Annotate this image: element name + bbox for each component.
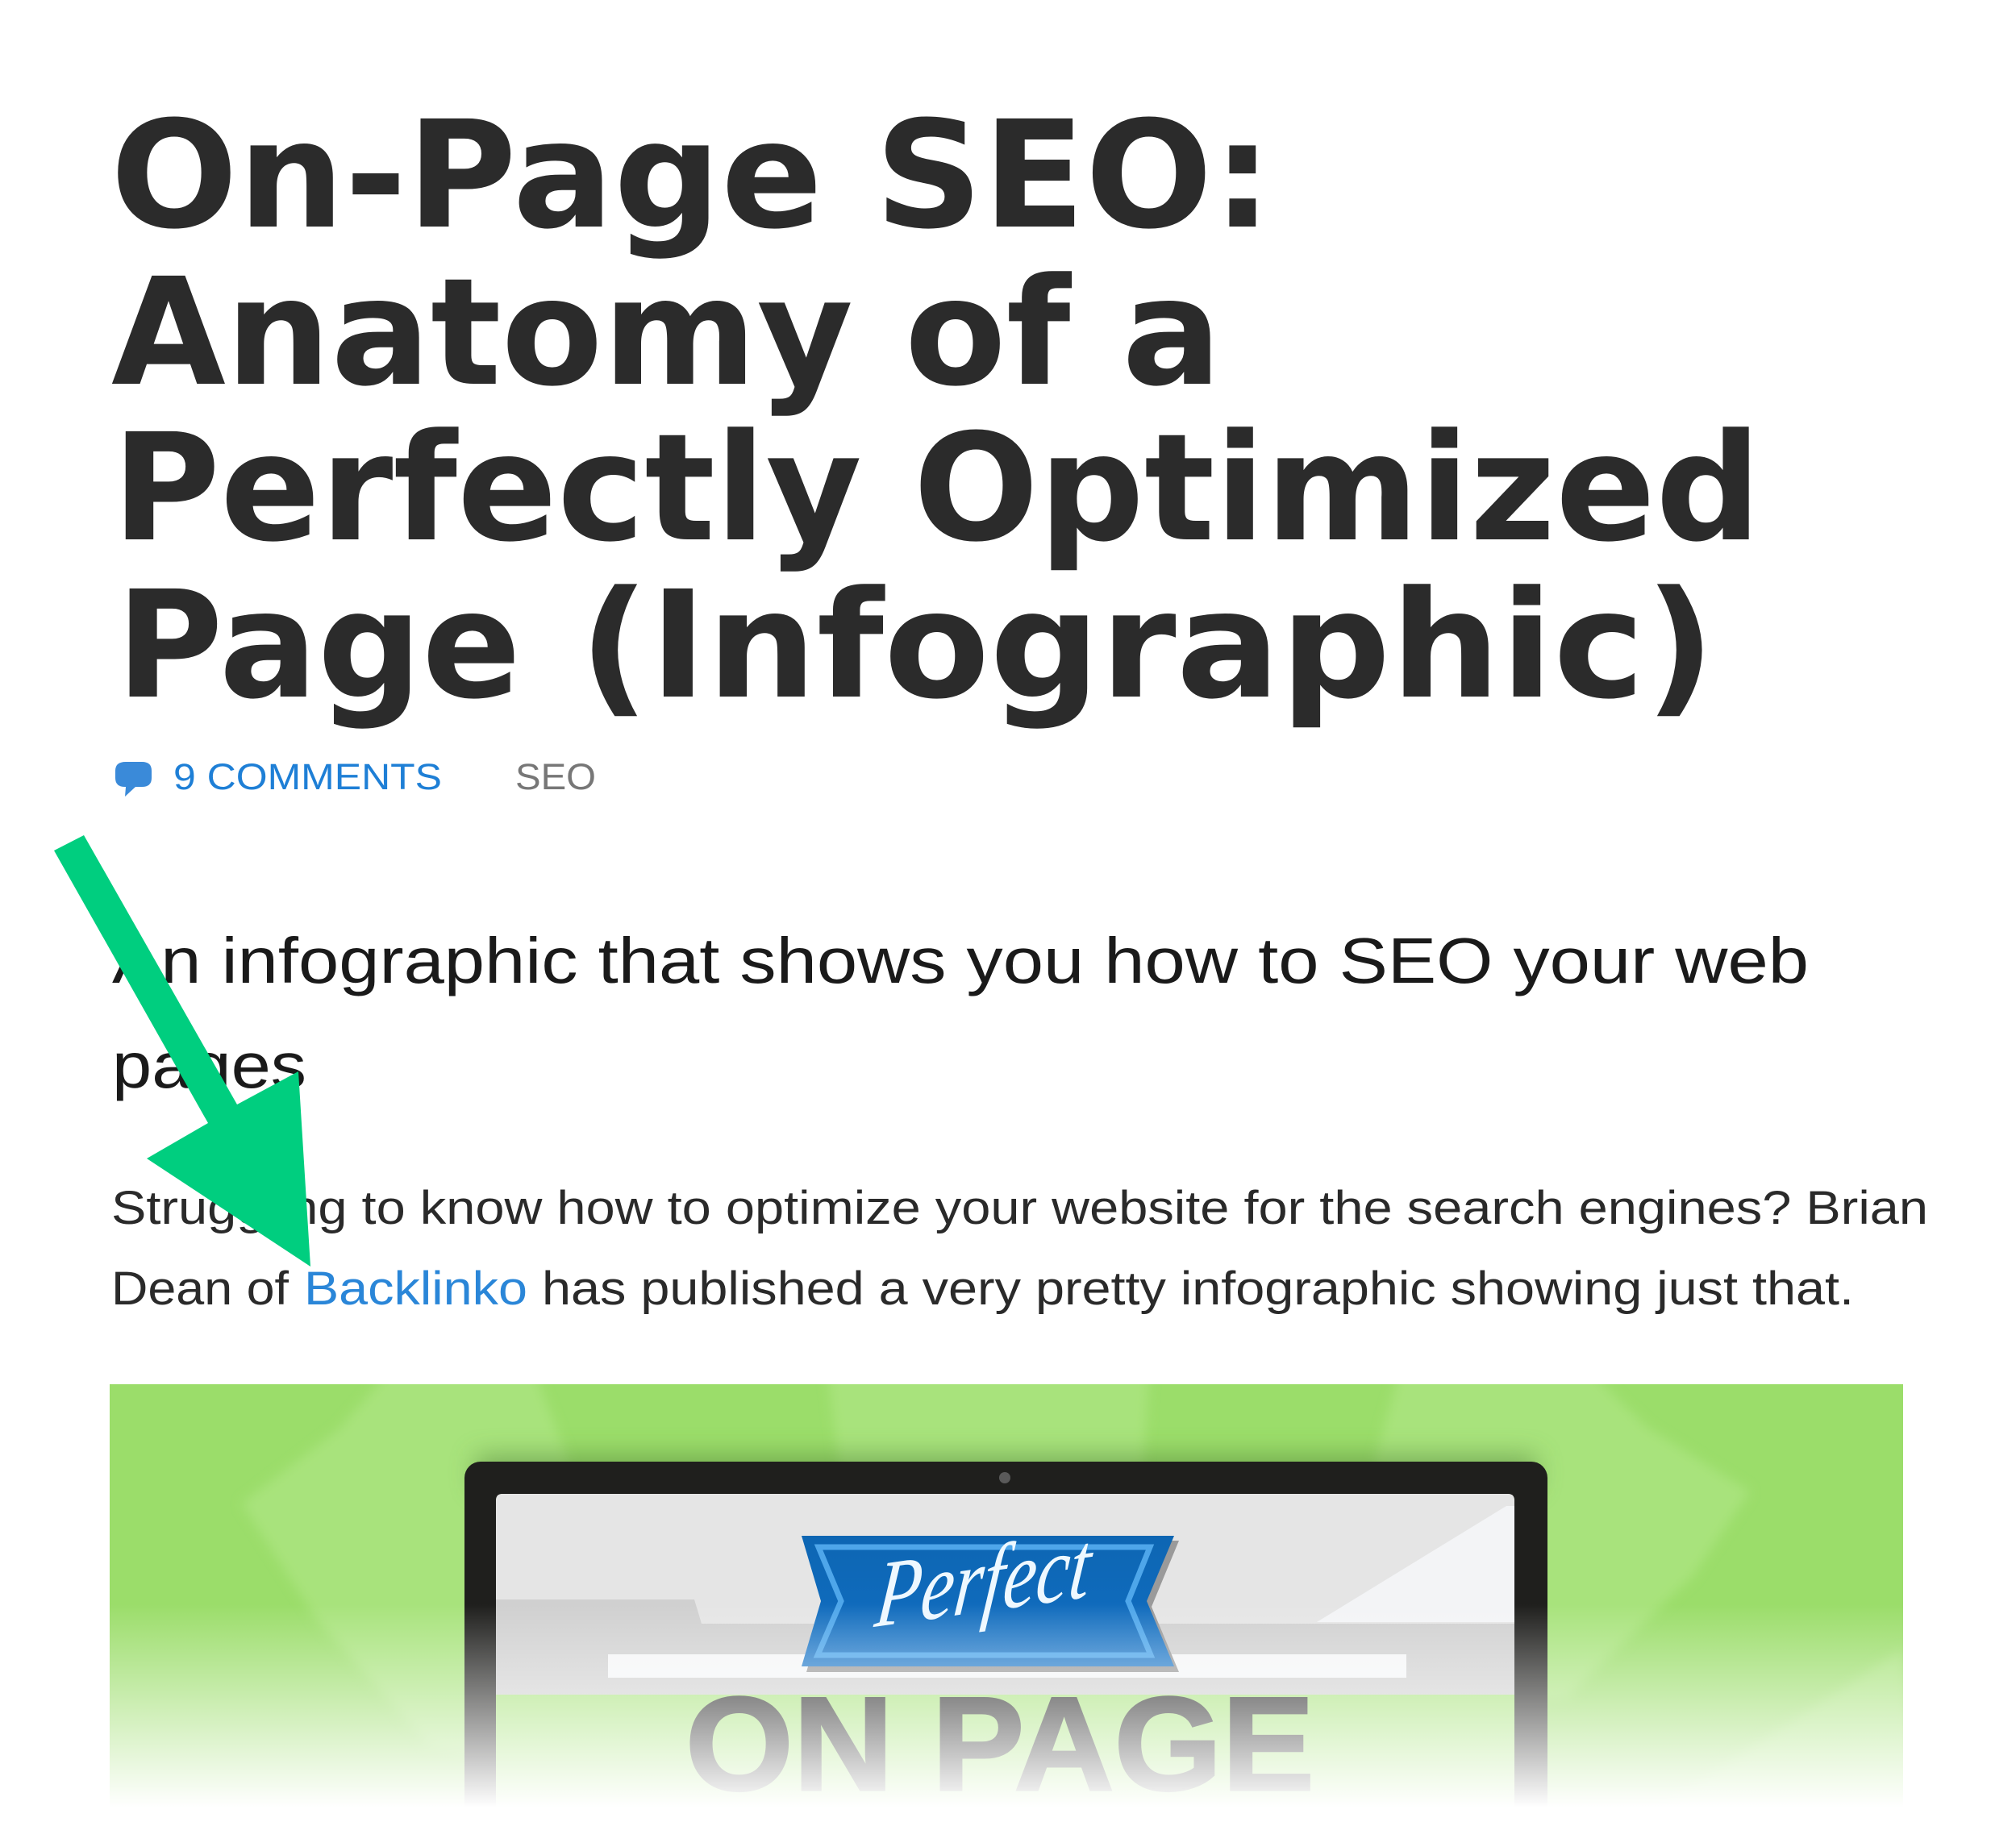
search bar	[608, 1654, 1406, 1678]
hero image: laptop on green background	[110, 1371, 1919, 1822]
green background	[110, 1384, 1903, 1822]
camera	[999, 1472, 1010, 1483]
white fade	[110, 1596, 1903, 1822]
intro paragraph: Dean of	[111, 1263, 289, 1315]
ribbon: Perfect: Perfect	[870, 1512, 1098, 1648]
intro paragraph: has published a very pretty infographic showing just that.	[542, 1263, 1854, 1315]
post meta row	[115, 756, 596, 797]
subheading	[112, 925, 1809, 1101]
intro paragraph	[111, 1182, 1928, 1315]
category: SEO	[515, 756, 596, 797]
ribbon: Perfect	[802, 1536, 1179, 1672]
link: Backlinko: Backlinko	[304, 1263, 527, 1315]
title	[110, 89, 1761, 732]
title: Perfectly Optimized	[112, 402, 1761, 575]
subheading: An infographic that shows you how to SEO your web	[112, 925, 1809, 996]
ON PAGE heading: ON PAGE	[685, 1670, 1314, 1818]
laptop shadow	[476, 1456, 1536, 1488]
subheading: pages	[112, 1030, 306, 1101]
comments link: 9 COMMENTS	[173, 756, 442, 797]
title: Anatomy of a	[111, 247, 1222, 419]
light beams	[245, 1384, 1902, 1717]
intro paragraph: Struggling to know how to optimize your website for the search engines? Brian	[111, 1182, 1928, 1234]
arrow: green pointer	[54, 835, 310, 1267]
laptop screen	[496, 1494, 1514, 1822]
title: On-Page SEO:	[110, 89, 1272, 262]
laptop frame	[464, 1462, 1547, 1822]
title: (Infographic)	[579, 559, 1715, 732]
title: Page	[116, 559, 521, 732]
icon: comment bubble	[115, 762, 152, 797]
